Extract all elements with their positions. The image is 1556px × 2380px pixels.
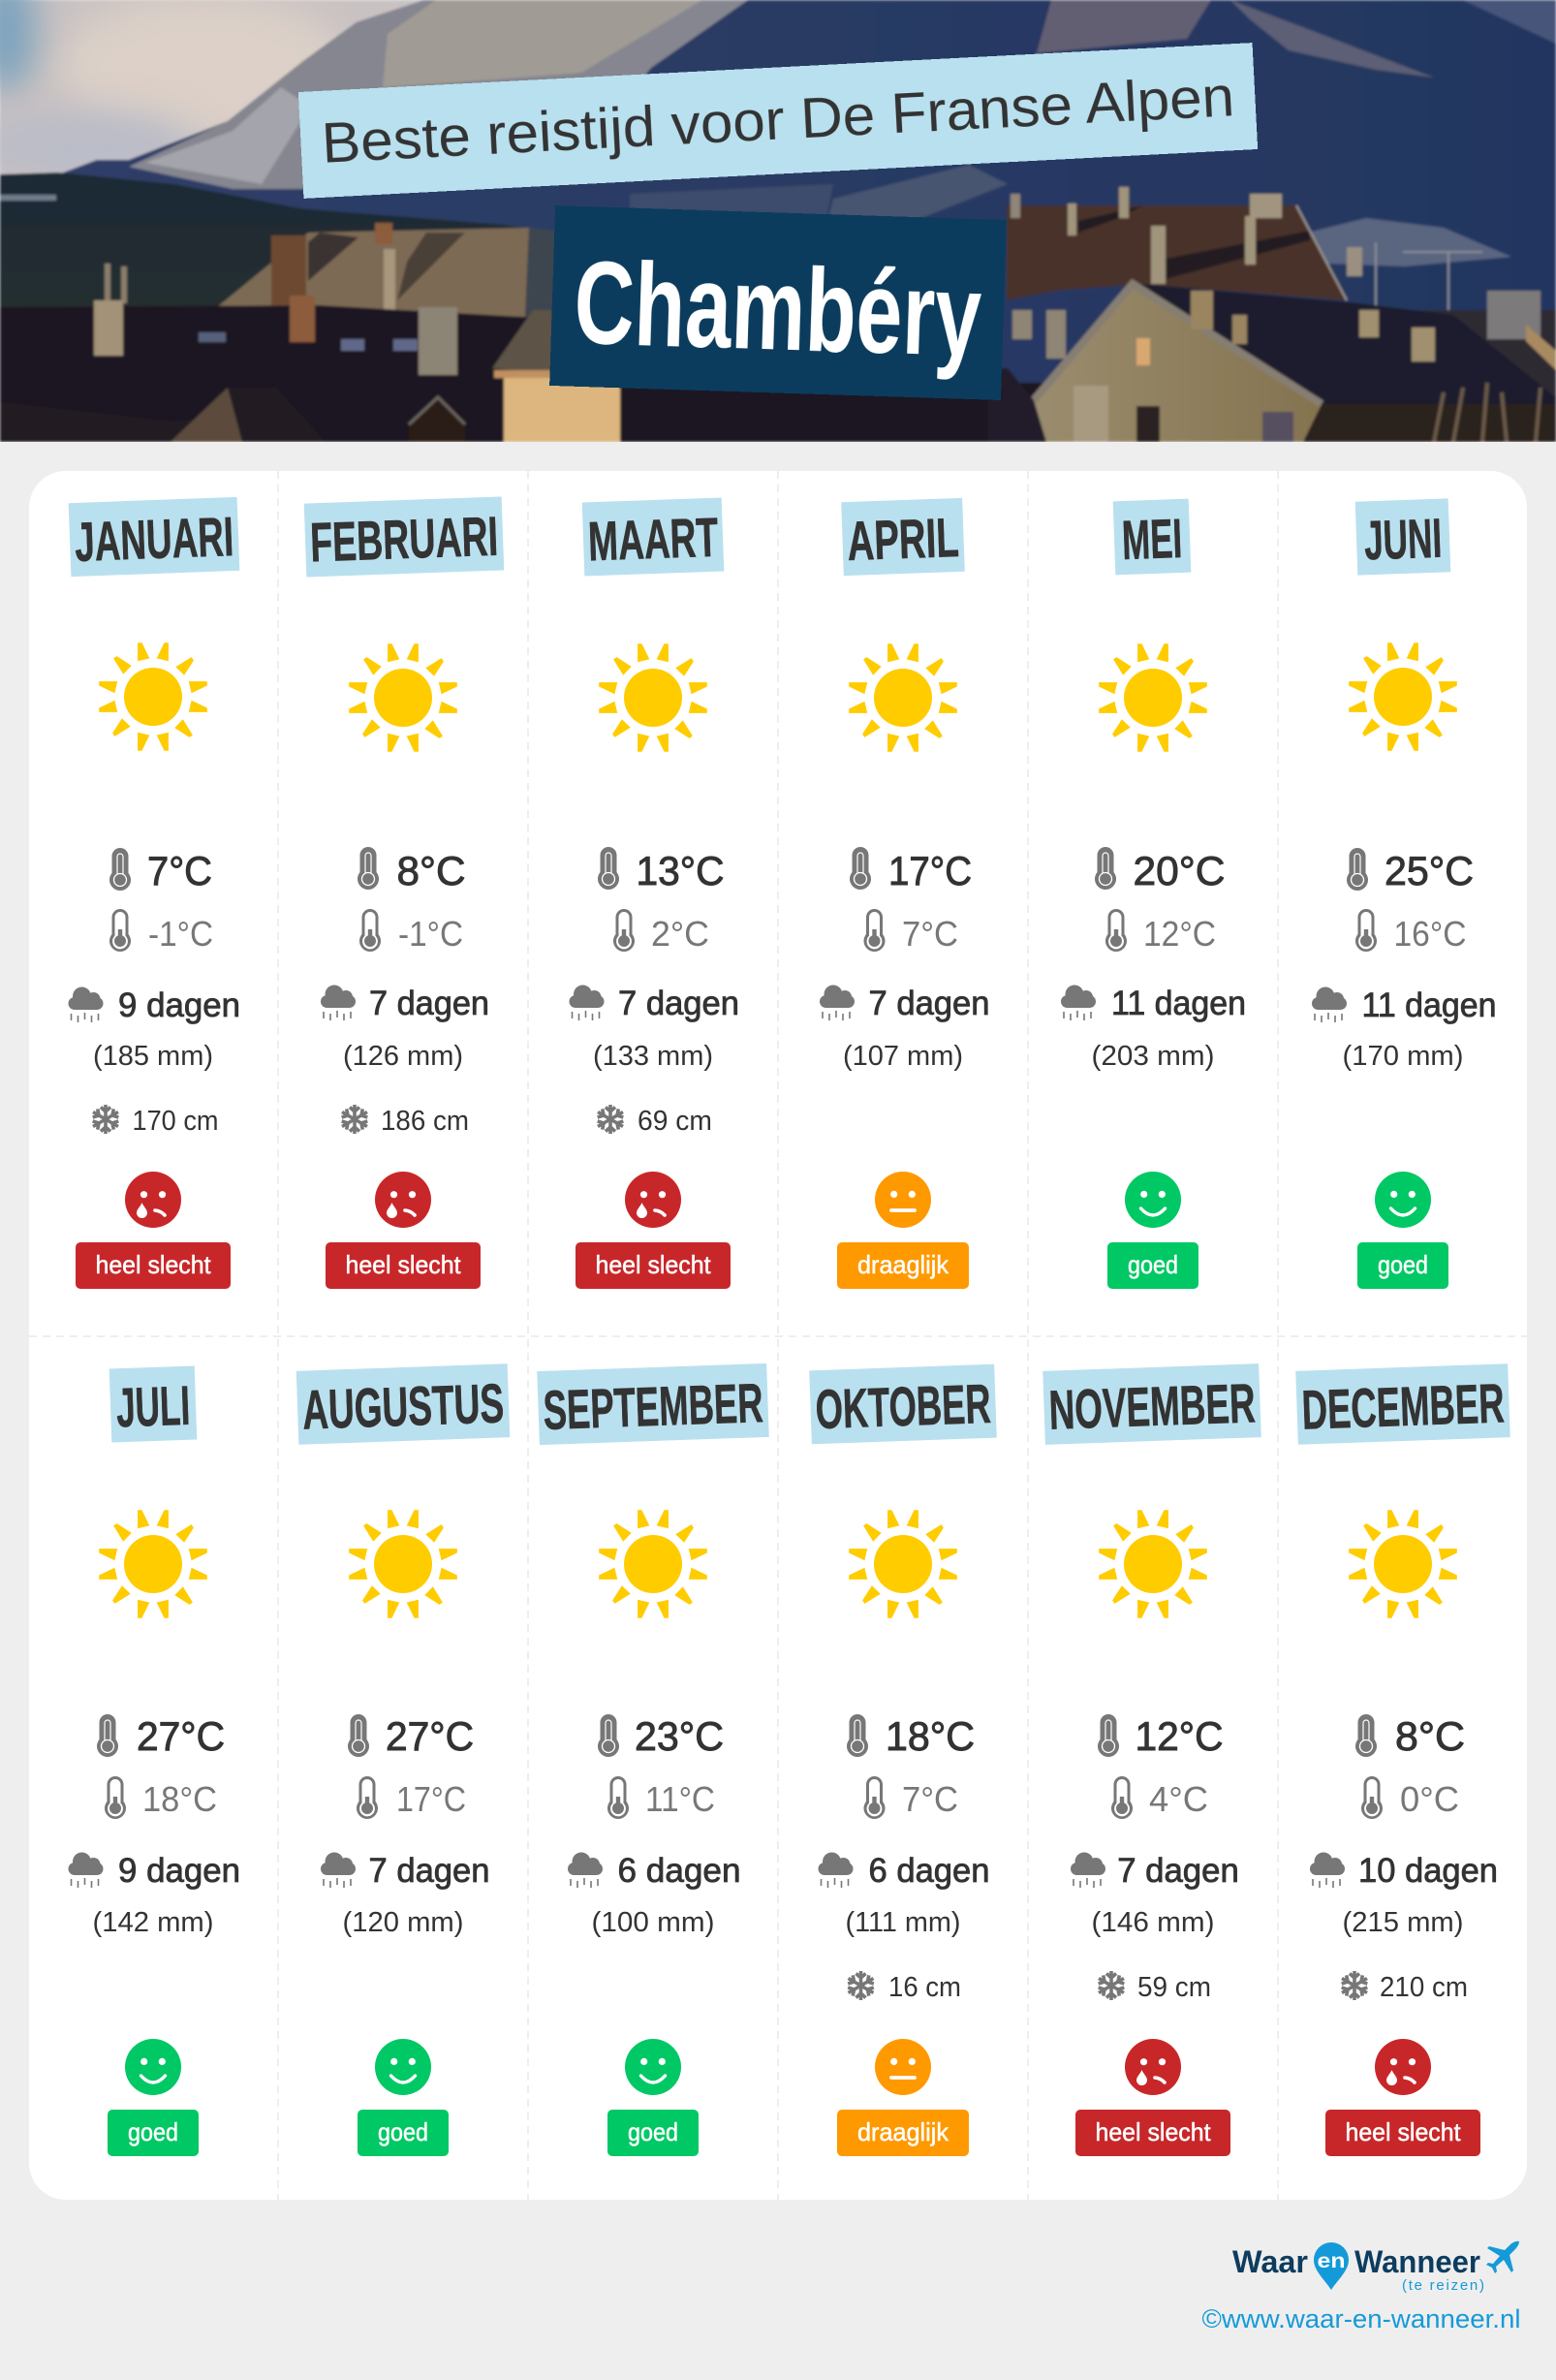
snowfall: 59 cm xyxy=(1137,1972,1211,2003)
icon: sun xyxy=(349,1510,457,1618)
central dark roofs under the title xyxy=(620,383,1046,442)
rainfall: (146 mm) xyxy=(1091,1907,1215,1938)
snowfall: 186 cm xyxy=(381,1106,469,1137)
icon: sun xyxy=(849,643,957,752)
min temperature: 2°C xyxy=(651,914,709,954)
rating badge: goed xyxy=(378,2117,428,2146)
icon: thermometer low xyxy=(105,1776,126,1819)
heading banner: Beste reistijd voor De Franse Alpen xyxy=(320,65,1236,175)
month label xyxy=(1355,498,1450,576)
max temperature: 12°C xyxy=(1136,1713,1223,1759)
icon: happy face xyxy=(125,2039,181,2095)
icon: thermometer low xyxy=(359,909,381,952)
month: oktober xyxy=(809,1364,997,2156)
min temperature: 4°C xyxy=(1149,1779,1208,1819)
icon: happy face xyxy=(625,2039,681,2095)
month label: MAART xyxy=(587,507,719,573)
month label xyxy=(109,1365,197,1443)
rain days: 6 dagen xyxy=(618,1852,740,1890)
month: januari xyxy=(68,497,240,1289)
icon: neutral face xyxy=(875,2039,931,2095)
rating badge: draaglijk xyxy=(857,1250,949,1279)
min temperature: 17°C xyxy=(396,1779,466,1819)
icon: thermometer high xyxy=(97,1714,118,1757)
rating badge: goed xyxy=(1378,1250,1428,1279)
icon: sun xyxy=(1349,642,1457,751)
icon: sun xyxy=(849,1510,957,1618)
month label xyxy=(1113,499,1191,575)
icon: thermometer high xyxy=(1098,1714,1119,1757)
rainfall: (185 mm) xyxy=(93,1041,213,1072)
icon: thermometer high xyxy=(1355,1714,1377,1757)
rainfall: (126 mm) xyxy=(343,1041,463,1072)
icon: snow xyxy=(340,1105,369,1134)
icon: happy face xyxy=(375,2039,431,2095)
website url: ©www.waar-en-wanneer.nl xyxy=(1201,2304,1521,2333)
icon: thermometer low xyxy=(1361,1776,1383,1819)
month label: APRIL xyxy=(847,507,960,573)
min temperature: -1°C xyxy=(148,914,213,954)
month label xyxy=(1043,1363,1261,1445)
month: september xyxy=(537,1363,769,2156)
month: april xyxy=(820,498,990,1289)
icon: happy face xyxy=(1125,1172,1181,1228)
logo: Waar en Wanneer: en xyxy=(1318,2250,1345,2272)
max temperature: 23°C xyxy=(635,1713,724,1759)
icon: sad face xyxy=(375,1172,431,1228)
rating badge xyxy=(108,2110,199,2156)
snowfall: 16 cm xyxy=(888,1972,961,2003)
icon: sun xyxy=(99,642,207,751)
month label: SEPTEMBER xyxy=(543,1372,764,1442)
month label xyxy=(841,498,965,576)
dark roofs xyxy=(0,305,540,442)
snowfall: 210 cm xyxy=(1380,1972,1468,2003)
month: november xyxy=(1043,1363,1261,2156)
icon: thermometer low xyxy=(357,1776,378,1819)
rating badge xyxy=(1325,2110,1480,2156)
logo: Waar en Wanneer: Waar xyxy=(1232,2244,1308,2279)
icon: rain xyxy=(1312,986,1347,1022)
max temperature: 17°C xyxy=(888,848,972,893)
month: februari xyxy=(304,496,504,1289)
rating badge: heel slecht xyxy=(95,1250,211,1279)
max temperature: 8°C xyxy=(397,848,465,893)
rating badge: goed xyxy=(1128,1250,1178,1279)
min temperature: 16°C xyxy=(1393,914,1467,954)
panel: climate table xyxy=(29,471,1527,2200)
rating badge xyxy=(837,2110,969,2156)
min temperature: -1°C xyxy=(398,914,463,954)
stone house and dark roof xyxy=(1140,284,1556,442)
icon: rain xyxy=(818,1853,853,1888)
icon: thermometer low xyxy=(607,1776,629,1819)
icon: rain xyxy=(568,1853,603,1888)
rating badge xyxy=(358,2110,449,2156)
icon: map pin xyxy=(1314,2242,1349,2290)
far right buildings xyxy=(1418,309,1556,397)
logo: Waar en Wanneer: (te reizen) xyxy=(1402,2277,1484,2294)
rating badge: heel slecht xyxy=(345,1250,461,1279)
icon: sun xyxy=(1099,643,1207,752)
rating badge xyxy=(576,1242,731,1289)
month: juni xyxy=(1312,498,1496,1289)
rainfall: (170 mm) xyxy=(1343,1041,1463,1072)
icon: thermometer low xyxy=(864,909,886,952)
icon: thermometer high xyxy=(598,1714,619,1757)
icon: sad face xyxy=(1375,2039,1431,2095)
max temperature: 13°C xyxy=(636,848,725,893)
icon: sun xyxy=(599,643,707,752)
min temperature: 11°C xyxy=(645,1779,715,1819)
min temperature: 18°C xyxy=(142,1779,217,1819)
icon: sun xyxy=(599,1510,707,1618)
month label: JUNI xyxy=(1363,508,1443,572)
icon: thermometer high xyxy=(109,848,131,891)
month label: OKTOBER xyxy=(815,1373,992,1441)
max temperature: 18°C xyxy=(886,1713,975,1759)
rainfall: (111 mm) xyxy=(845,1907,961,1938)
icon: sun xyxy=(1349,1510,1457,1618)
max temperature: 27°C xyxy=(137,1713,225,1759)
month label xyxy=(809,1364,997,1444)
rainfall: (142 mm) xyxy=(93,1907,213,1938)
rainfall: (120 mm) xyxy=(343,1907,463,1938)
icon: thermometer high xyxy=(1347,848,1368,891)
month label: MEI xyxy=(1121,508,1183,572)
max temperature: 8°C xyxy=(1395,1713,1465,1759)
month label: FEBRUARI xyxy=(309,506,499,574)
city title: Chambéry xyxy=(573,236,983,381)
max temperature: 7°C xyxy=(147,848,212,893)
month: maart xyxy=(570,498,739,1289)
icon: thermometer high xyxy=(850,847,871,890)
rating badge xyxy=(607,2110,699,2156)
icon: sun xyxy=(99,1510,207,1618)
heading banner xyxy=(298,43,1258,199)
rainfall: (203 mm) xyxy=(1091,1041,1215,1072)
min temperature: 0°C xyxy=(1400,1779,1459,1819)
icon: rain xyxy=(820,985,855,1020)
rain days: 7 dagen xyxy=(868,985,990,1022)
max temperature: 20°C xyxy=(1134,848,1225,893)
rainfall: (215 mm) xyxy=(1343,1907,1463,1938)
min temperature: 7°C xyxy=(902,1779,958,1819)
snowfall: 170 cm xyxy=(132,1106,219,1137)
icon: rain xyxy=(1310,1853,1345,1888)
rating badge xyxy=(837,1242,969,1289)
rating badge: heel slecht xyxy=(1095,2117,1211,2146)
rain days: 11 dagen xyxy=(1362,986,1496,1024)
month: augustus xyxy=(296,1363,510,2156)
rain days: 7 dagen xyxy=(618,985,739,1022)
brown roof xyxy=(1007,205,1347,300)
rating badge: draaglijk xyxy=(857,2117,949,2146)
rain days: 7 dagen xyxy=(369,985,489,1022)
rating badge xyxy=(1075,2110,1230,2156)
logo: Waar en Wanneer: Wanneer xyxy=(1354,2244,1480,2279)
max temperature: 25°C xyxy=(1385,848,1474,893)
icon: rain xyxy=(1061,985,1096,1020)
icon: thermometer low xyxy=(109,909,131,952)
month label xyxy=(296,1363,510,1445)
icon: rain xyxy=(321,1853,356,1888)
month label: JULI xyxy=(115,1375,191,1439)
rating badge xyxy=(326,1242,481,1289)
min temperature: 7°C xyxy=(902,914,958,954)
month: mei xyxy=(1061,499,1246,1289)
icon: thermometer high xyxy=(847,1714,868,1757)
rain days: 9 dagen xyxy=(118,986,240,1024)
month label: AUGUSTUS xyxy=(301,1372,505,1442)
icon: thermometer high xyxy=(358,847,379,890)
icon: rain xyxy=(68,986,103,1022)
icon: snow xyxy=(91,1105,120,1134)
icon: thermometer low xyxy=(1105,909,1127,952)
min temperature: 12°C xyxy=(1143,914,1216,954)
icon: thermometer low xyxy=(1355,909,1377,952)
icon: snow xyxy=(1097,1971,1126,2000)
rain days: 10 dagen xyxy=(1358,1852,1498,1890)
rain days: 9 dagen xyxy=(118,1852,240,1890)
rating badge xyxy=(76,1242,231,1289)
rain days: 6 dagen xyxy=(868,1852,990,1890)
month label xyxy=(69,497,239,577)
cream tower xyxy=(492,310,552,373)
rating badge: goed xyxy=(128,2117,178,2146)
rating badge: heel slecht xyxy=(1345,2117,1461,2146)
rainfall: (107 mm) xyxy=(843,1041,963,1072)
icon: rain xyxy=(1071,1853,1105,1888)
icon: sad face xyxy=(625,1172,681,1228)
icon: thermometer low xyxy=(864,1776,886,1819)
month: december xyxy=(1295,1363,1510,2156)
icon: thermometer high xyxy=(1095,847,1116,890)
icon: happy face xyxy=(1375,1172,1431,1228)
icon: snow xyxy=(596,1105,625,1134)
bottom gables xyxy=(171,388,242,442)
header photo: alpine rooftops of Chambéry xyxy=(0,0,1556,442)
icon: sun xyxy=(1099,1510,1207,1618)
max temperature: 27°C xyxy=(386,1713,474,1759)
rain days: 7 dagen xyxy=(368,1852,490,1890)
icon: rain xyxy=(570,985,605,1020)
city title xyxy=(549,205,1007,400)
snowfall: 69 cm xyxy=(638,1106,712,1137)
rating badge xyxy=(1107,1242,1198,1289)
rating badge xyxy=(1357,1242,1448,1289)
rating badge: heel slecht xyxy=(595,1250,711,1279)
icon: snow xyxy=(1340,1971,1369,2000)
icon: thermometer high xyxy=(598,847,619,890)
rain days: 7 dagen xyxy=(1117,1852,1239,1890)
icon: thermometer low xyxy=(1111,1776,1133,1819)
month label xyxy=(582,498,724,576)
month label: NOVEMBER xyxy=(1048,1372,1257,1442)
icon: sad face xyxy=(125,1172,181,1228)
tan roof xyxy=(217,228,529,317)
icon: thermometer low xyxy=(613,909,635,952)
icon: rain xyxy=(321,985,356,1020)
icon: sun xyxy=(349,643,457,752)
month: juli xyxy=(68,1365,240,2156)
icon: airplane xyxy=(1486,2241,1519,2273)
month label xyxy=(537,1363,769,1445)
rain days: 11 dagen xyxy=(1111,985,1246,1022)
icon: neutral face xyxy=(875,1172,931,1228)
icon: snow xyxy=(846,1971,876,2000)
rainfall: (100 mm) xyxy=(591,1907,715,1938)
rainfall: (133 mm) xyxy=(593,1041,713,1072)
rating badge: goed xyxy=(628,2117,678,2146)
month label: JANUARI xyxy=(74,506,234,574)
icon: thermometer high xyxy=(348,1714,369,1757)
icon: sad face xyxy=(1125,2039,1181,2095)
icon: rain xyxy=(68,1853,103,1888)
month label xyxy=(304,496,504,578)
logo: Waar en Wanneer xyxy=(1232,2241,1519,2294)
